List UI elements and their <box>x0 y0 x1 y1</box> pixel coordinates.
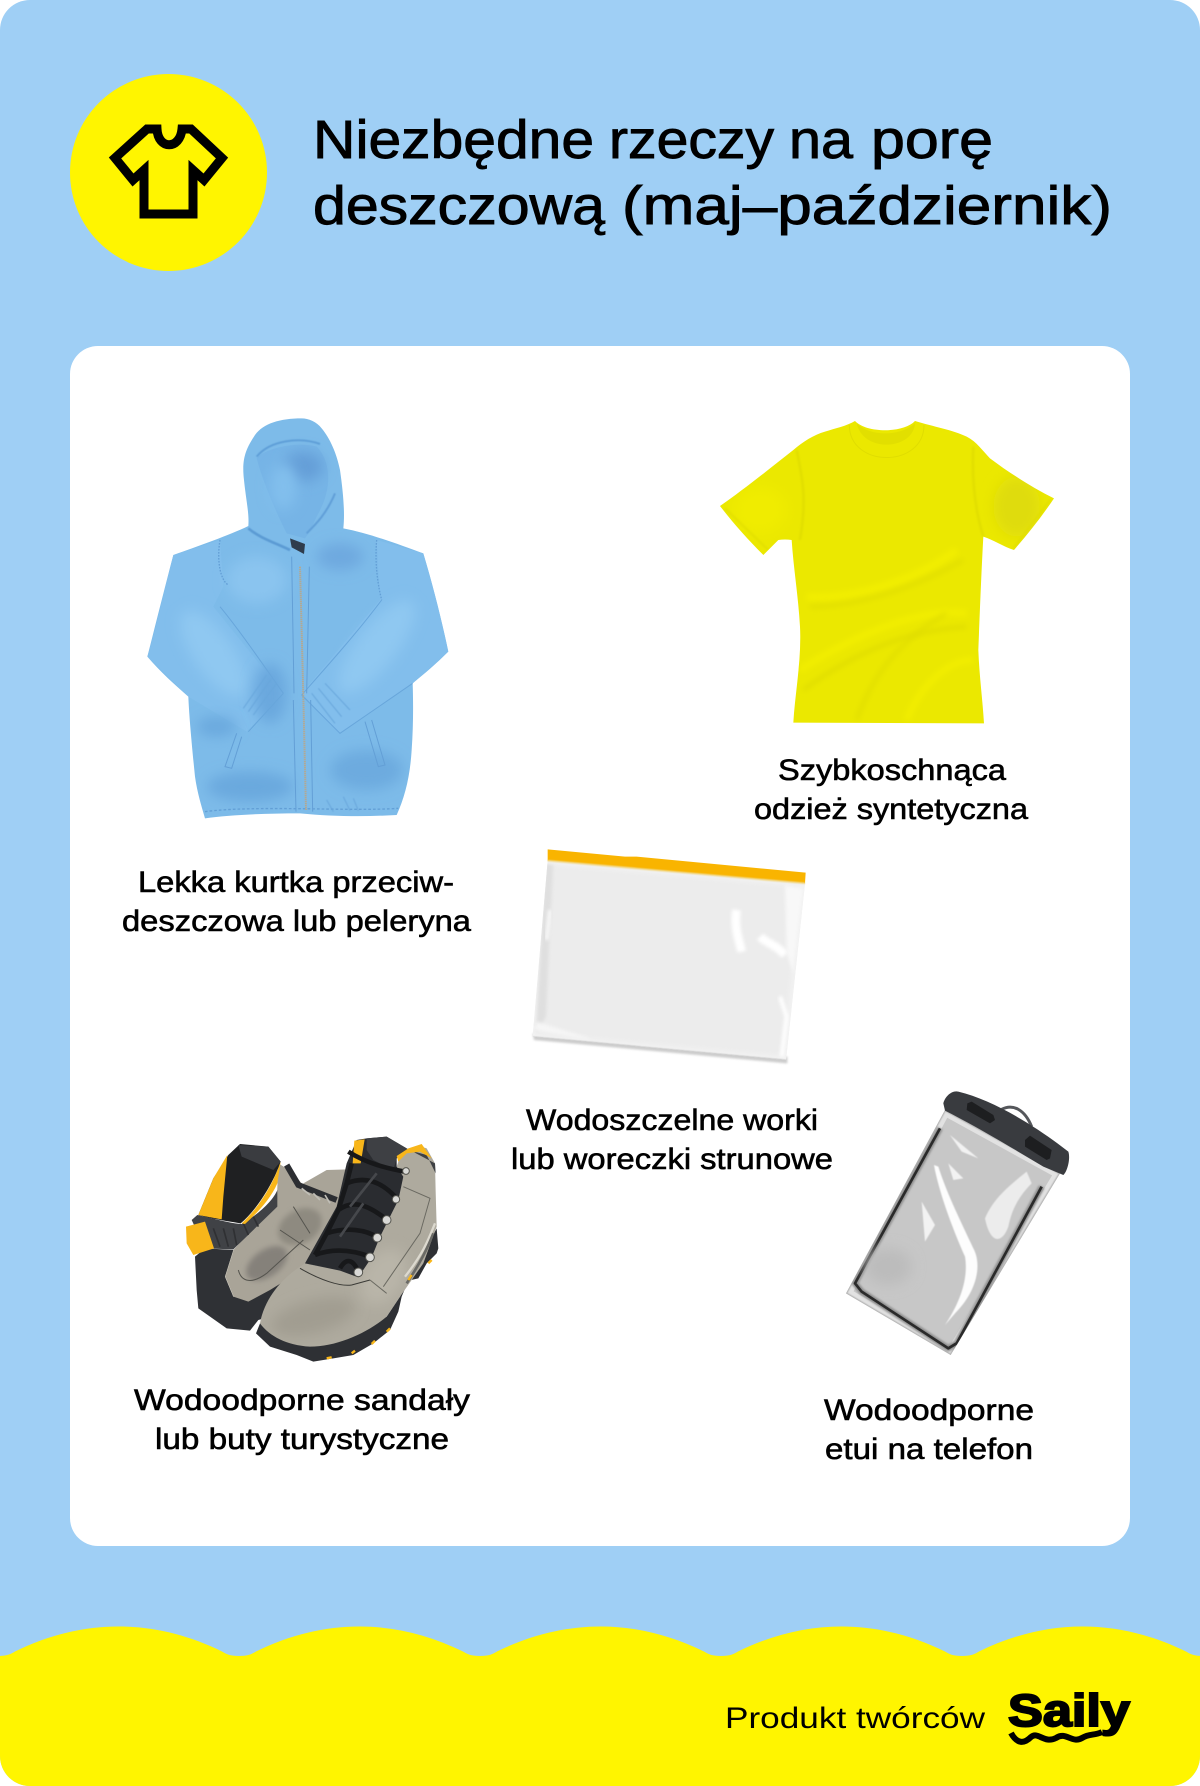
tongue and laces <box>305 1137 407 1277</box>
label: jacket <box>122 866 471 938</box>
footer credit text: Produkt twórców <box>725 1702 985 1735</box>
panel: white card <box>70 346 1130 1546</box>
label: bag <box>512 1108 832 1170</box>
illustration: waterproof phone pouch <box>846 1091 1069 1355</box>
label: t-shirt <box>754 754 1028 826</box>
heel tab <box>186 1222 214 1255</box>
logo: Saily: Saily <box>1008 1685 1130 1736</box>
label: t-shirt: odzież syntetyczna <box>754 793 1028 826</box>
laces <box>287 1165 337 1200</box>
label: boots: Wodoodporne sandały <box>134 1384 470 1417</box>
zipper <box>300 567 306 810</box>
title <box>313 110 1112 236</box>
icon: yellow circle with t-shirt <box>70 74 267 271</box>
title: deszczową <box>313 176 606 236</box>
label: jacket: Lekka kurtka przeciw- <box>138 866 454 899</box>
ribbed collar <box>192 1190 277 1249</box>
hem gathers <box>205 808 398 812</box>
footer wave band <box>0 1626 1200 1786</box>
illustration: hiking boots <box>186 1137 438 1362</box>
label: phone pouch <box>824 1398 1033 1460</box>
label: t-shirt: Szybkoschnąca <box>778 754 1006 787</box>
label: boots: lub buty turystyczne <box>155 1423 449 1456</box>
sole flecks <box>327 1260 432 1358</box>
back boot <box>186 1144 348 1331</box>
label: boots <box>134 1384 470 1456</box>
label: bag: lub woreczki strunowe <box>511 1143 833 1176</box>
title: rzeczy <box>609 110 774 170</box>
title: na <box>789 110 854 170</box>
label: bag: Wodoszczelne worki <box>526 1104 818 1137</box>
cuff gathers <box>243 683 350 724</box>
label: phone pouch: etui na telefon <box>825 1433 1033 1466</box>
illustration: yellow t-shirt <box>720 421 1054 723</box>
illustration: blue rain jacket <box>147 418 448 818</box>
title: porę <box>871 110 993 170</box>
eyelets <box>354 1168 409 1277</box>
label: jacket: deszczowa lub peleryna <box>122 905 471 938</box>
zipper strip <box>548 849 806 883</box>
strap loop <box>1002 1107 1032 1127</box>
collar <box>857 423 915 445</box>
label: phone pouch: Wodoodporne <box>824 1394 1034 1427</box>
title: Niezbędne <box>313 110 594 170</box>
interior and lining <box>198 1144 281 1223</box>
top clamp <box>943 1091 1069 1175</box>
collar label <box>290 538 305 554</box>
front boot <box>256 1137 438 1362</box>
illustration: clear zip bag <box>533 849 806 1063</box>
title: (maj–październik) <box>622 176 1112 236</box>
